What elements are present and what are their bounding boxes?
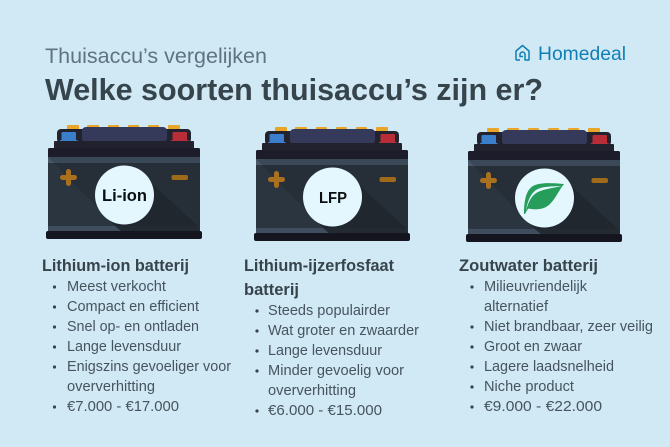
- list: alternatief: [484, 298, 549, 315]
- icon: minus: [172, 175, 188, 180]
- list: €6.000 - €15.000: [268, 402, 382, 419]
- list: Wat groter en zwaarder: [268, 322, 419, 339]
- column: Lithium-ion: [42, 256, 231, 415]
- list: Compact en efficient: [67, 298, 200, 315]
- icon: plus: [62, 172, 74, 184]
- terminal: negative: [591, 135, 608, 144]
- list: Milieuvriendelijk: [484, 278, 587, 295]
- badge: Li-ion: [95, 166, 154, 224]
- badge: leaf: [515, 168, 574, 228]
- tabs: [67, 125, 180, 130]
- icon: house: [516, 46, 529, 60]
- brand name: Homedeal: [538, 43, 626, 65]
- list: Lange levensduur: [67, 338, 181, 355]
- heading: Lithium-ion batterij: [42, 256, 189, 275]
- list: Lagere laadsnelheid: [484, 358, 614, 375]
- list: Snel op- en ontladen: [67, 318, 199, 335]
- list: Meest verkocht: [67, 278, 167, 295]
- tabs: [275, 127, 388, 132]
- terminal: positive: [60, 132, 78, 141]
- heading: Zoutwater batterij: [459, 256, 598, 275]
- heading: batterij: [244, 280, 299, 299]
- list: [53, 278, 231, 415]
- badge: LFP: LFP: [319, 190, 347, 207]
- tabs: [487, 128, 600, 133]
- list: [255, 302, 419, 419]
- list: Groot en zwaar: [484, 338, 582, 355]
- subtitle: Thuisaccu’s vergelijken: [45, 44, 267, 68]
- logo: Homedeal: [516, 43, 626, 65]
- battery: Li-ion: [46, 125, 202, 239]
- icon: plus: [482, 174, 494, 186]
- icon: minus: [380, 177, 396, 182]
- list: [470, 278, 653, 415]
- list: €7.000 - €17.000: [67, 398, 179, 415]
- title: Welke soorten thuisaccu’s zijn er?: [45, 72, 543, 107]
- battery: LFP: [254, 127, 410, 241]
- list: oververhitting: [67, 378, 155, 395]
- heading: [244, 256, 394, 299]
- terminal: positive: [480, 135, 498, 144]
- badge: Li-ion: Li-ion: [102, 186, 147, 205]
- terminal: positive: [268, 134, 286, 143]
- icon: plus: [270, 174, 282, 186]
- list: Lange levensduur: [268, 342, 382, 359]
- list: Niche product: [484, 378, 575, 395]
- list: Steeds populairder: [268, 302, 390, 319]
- terminal: negative: [171, 132, 188, 141]
- heading: Lithium-ijzerfosfaat: [244, 256, 394, 275]
- battery: saltwater: [466, 128, 622, 242]
- list: Niet brandbaar, zeer veilig: [484, 318, 653, 335]
- list: €9.000 - €22.000: [484, 398, 602, 415]
- badge: LFP: [303, 168, 362, 226]
- list: oververhitting: [268, 382, 356, 399]
- terminal: negative: [379, 134, 396, 143]
- column: Zoutwater: [459, 256, 653, 415]
- list: Enigszins gevoeliger voor: [67, 358, 231, 375]
- column: Lithium-ijzerfosfaat: [244, 256, 419, 419]
- list: Minder gevoelig voor: [268, 362, 404, 379]
- icon: minus: [592, 178, 608, 183]
